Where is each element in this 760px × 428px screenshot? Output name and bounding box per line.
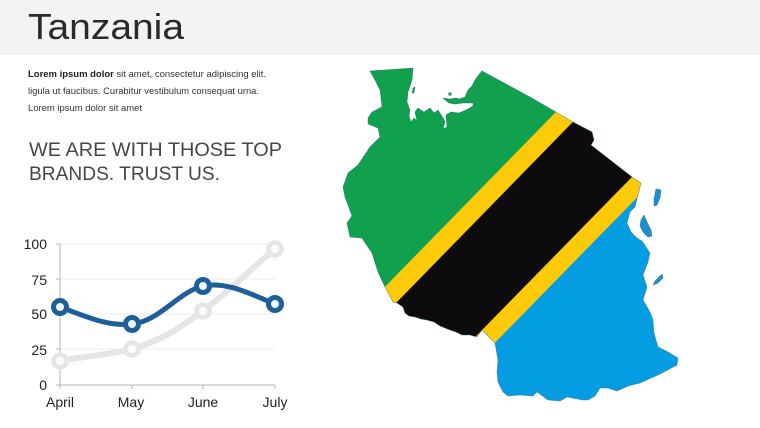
y axis labels: 75 <box>31 272 47 288</box>
title: Tanzania <box>28 6 185 47</box>
header band <box>0 0 760 55</box>
grey data series <box>54 242 282 368</box>
heading: trust message <box>29 140 282 185</box>
y axis labels: 25 <box>31 342 47 358</box>
y axis labels: 100 <box>24 236 47 252</box>
y axis labels: 0 <box>39 377 47 393</box>
blue data series <box>54 280 282 330</box>
text block: intro paragraph: Lorem ipsum dolor sit amet, consectetur adipiscing elit. <box>28 68 266 79</box>
map: Tanzania with flag fill <box>342 68 678 402</box>
text block: intro paragraph <box>28 68 266 113</box>
x axis labels: May <box>118 394 144 410</box>
heading: trust message: BRANDS. TRUST US. <box>29 164 220 185</box>
black band <box>396 122 632 336</box>
green field <box>343 68 556 287</box>
y axis labels: 50 <box>31 306 47 322</box>
x axis labels: April <box>46 394 74 410</box>
text block: intro paragraph: Lorem ipsum dolor sit amet <box>28 102 142 113</box>
x axis labels <box>46 394 287 410</box>
yellow band <box>385 112 641 343</box>
lake islands <box>412 87 452 96</box>
line chart <box>24 236 287 410</box>
chart grid and axes <box>56 244 275 389</box>
x axis labels: July <box>263 394 287 410</box>
islands: Pemba, Zanzibar, Mafia <box>640 189 663 285</box>
x axis labels: June <box>188 394 218 410</box>
y axis labels <box>24 236 47 393</box>
text block: intro paragraph: ligula ut faucibus. Curabitur vestibulum consequat urna. <box>28 85 259 96</box>
heading: trust message: WE ARE WITH THOSE TOP <box>29 140 282 161</box>
flag colours clipped to country <box>343 68 678 401</box>
country outline <box>343 68 678 401</box>
